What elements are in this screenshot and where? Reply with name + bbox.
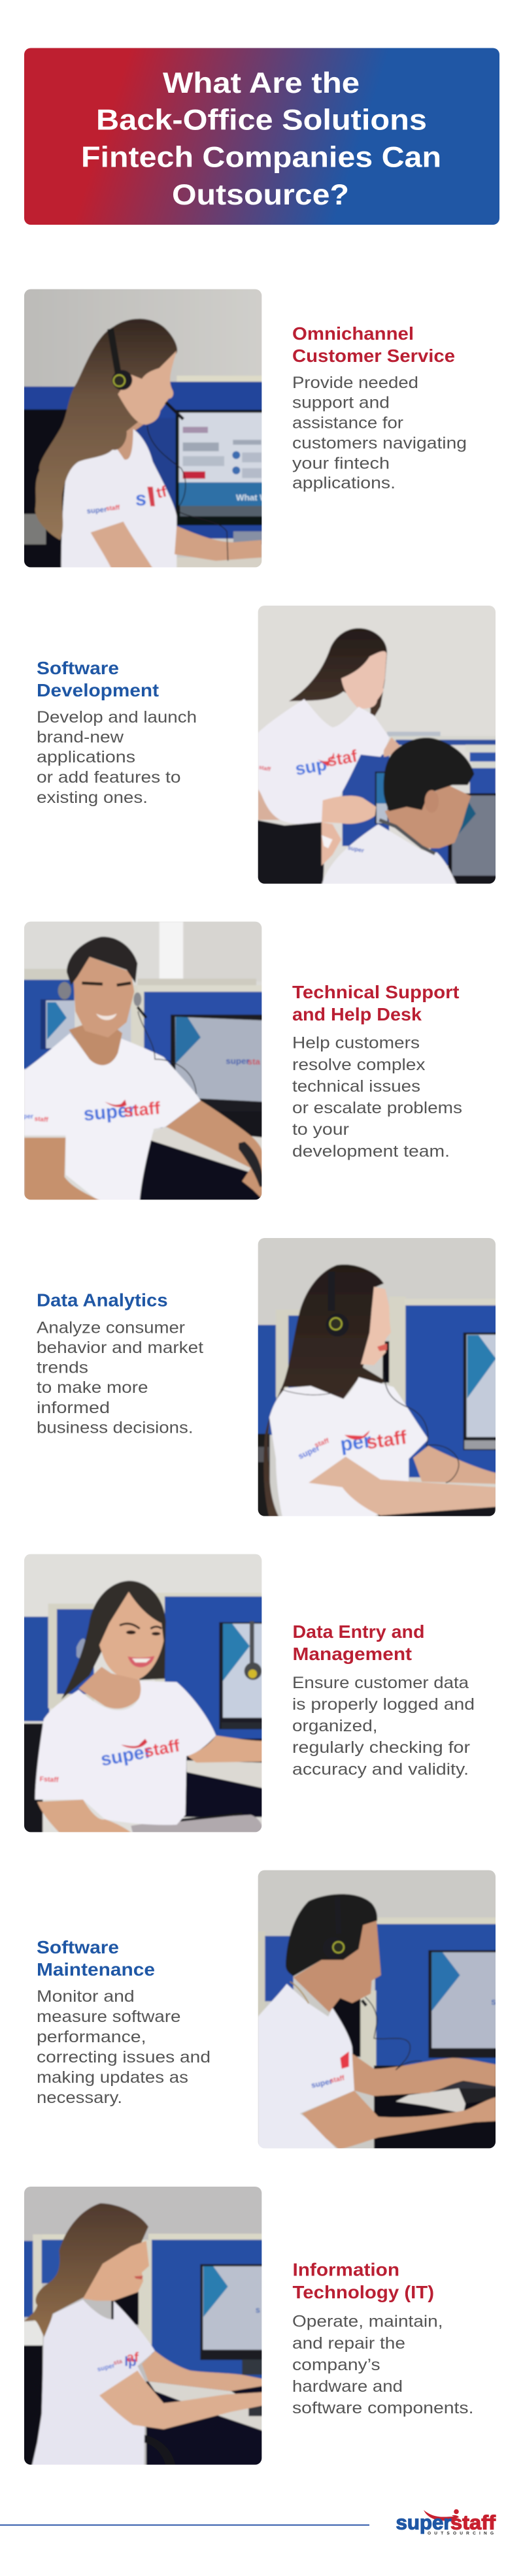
description: making updates as bbox=[37, 2068, 188, 2087]
photo: male agent typing bbox=[256, 1868, 498, 2151]
description: Operate, maintain, bbox=[292, 2313, 443, 2331]
description: to your bbox=[292, 1120, 349, 1139]
description bbox=[37, 1987, 211, 2107]
heading bbox=[292, 982, 459, 1024]
heading: Data Entry and bbox=[293, 1622, 425, 1642]
description: customers navigating bbox=[292, 434, 467, 453]
heading: and Help Desk bbox=[292, 1004, 422, 1024]
heading: Information bbox=[293, 2260, 399, 2280]
description: accuracy and validity. bbox=[292, 1760, 469, 1778]
description: Help customers bbox=[292, 1034, 420, 1052]
description: organized, bbox=[292, 1717, 378, 1735]
description: resolve complex bbox=[292, 1056, 426, 1074]
photo: smiling agent facing camera: staff bbox=[143, 1735, 181, 1761]
title: What Are the bbox=[163, 67, 360, 99]
photo: two colleagues at a monitor: staff bbox=[258, 764, 271, 772]
panel: information technology bbox=[22, 2185, 474, 2468]
photo: female agent typing: S bbox=[256, 2307, 260, 2315]
banner background bbox=[24, 48, 499, 225]
description: performance, bbox=[37, 2028, 146, 2046]
photo: male agent typing: S bbox=[491, 1998, 496, 2006]
photo: smiling agent with headset: sta bbox=[248, 1057, 261, 1067]
description: hardware and bbox=[292, 2377, 403, 2396]
panel: data entry and management bbox=[22, 1554, 475, 1836]
description: or add features to bbox=[37, 768, 180, 787]
description: behavior and market bbox=[37, 1339, 203, 1357]
logo dot bbox=[454, 2509, 459, 2514]
photo: smiling agent with headset: super bbox=[82, 1099, 137, 1125]
description bbox=[292, 2313, 473, 2417]
heading bbox=[293, 1622, 425, 1664]
footer rule bbox=[0, 2524, 369, 2526]
photo: agent in profile at desk: staff bbox=[314, 1437, 330, 1449]
heading: Maintenance bbox=[37, 1959, 155, 1980]
heading: Development bbox=[37, 680, 159, 700]
panel: omnichannel customer service bbox=[22, 287, 467, 570]
heading: Management bbox=[293, 1644, 412, 1664]
panel: technical support and help desk bbox=[22, 920, 462, 1203]
photo: female agent typing: af bbox=[127, 2350, 139, 2365]
description: is properly logged and bbox=[292, 1695, 475, 1714]
photo: male agent typing: staff bbox=[329, 2074, 345, 2085]
photo: smiling agent with headset: super bbox=[226, 1056, 250, 1066]
photo: smiling agent facing camera: Fstaff bbox=[39, 1775, 59, 1784]
photo: agent in profile at desk bbox=[256, 1237, 498, 1520]
photo: agent with headset: What W bbox=[236, 493, 268, 502]
description: regularly checking for bbox=[292, 1738, 470, 1757]
heading: Software bbox=[37, 1937, 119, 1957]
photo: male agent typing: super bbox=[311, 2076, 333, 2090]
photo: two colleagues at a monitor: staf bbox=[326, 746, 359, 770]
description: assistance for bbox=[292, 414, 403, 432]
description: trends bbox=[37, 1359, 88, 1377]
description bbox=[37, 1318, 203, 1437]
logo: superstaff outsourcing bbox=[396, 2509, 496, 2536]
heading: Omnichannel bbox=[292, 323, 414, 344]
title: Back-Office Solutions bbox=[96, 105, 427, 137]
description: software components. bbox=[292, 2399, 473, 2417]
description: measure software bbox=[37, 2008, 180, 2026]
description bbox=[292, 374, 467, 493]
photo: two colleagues at a monitor: sup bbox=[294, 754, 328, 779]
description: brand-new bbox=[37, 728, 124, 747]
description: development team. bbox=[292, 1142, 450, 1160]
description: your fintech bbox=[292, 455, 390, 473]
photo: female agent typing: super bbox=[97, 2362, 116, 2373]
panel: software maintenance bbox=[37, 1868, 498, 2151]
description bbox=[292, 1674, 475, 1778]
title: Outsource? bbox=[172, 179, 349, 211]
photo: smiling agent facing camera: super bbox=[99, 1741, 153, 1770]
description: applications. bbox=[292, 474, 396, 493]
logo wordmark: super bbox=[396, 2511, 451, 2534]
heading: Software bbox=[37, 658, 119, 678]
title banner bbox=[24, 48, 499, 225]
heading bbox=[37, 1937, 155, 1980]
description: company’s bbox=[292, 2356, 380, 2374]
photo: smiling agent with headset: per bbox=[23, 1113, 33, 1120]
panel: software development bbox=[37, 604, 498, 887]
photo: female agent typing: lp bbox=[124, 2355, 137, 2370]
description: technical issues bbox=[292, 1077, 420, 1096]
photo: agent with headset: s bbox=[135, 487, 146, 510]
description: and repair the bbox=[292, 2334, 405, 2353]
photo: smiling agent with headset: staff bbox=[34, 1115, 49, 1124]
photo: agent in profile at desk: per bbox=[339, 1429, 373, 1456]
photo: agent in profile at desk: staff bbox=[365, 1427, 409, 1454]
description: informed bbox=[37, 1399, 110, 1417]
logo wordmark bbox=[396, 2511, 496, 2534]
description: necessary. bbox=[37, 2089, 122, 2107]
photo: agent in profile at desk: super bbox=[297, 1443, 321, 1461]
description bbox=[292, 1034, 462, 1160]
description: business decisions. bbox=[37, 1419, 194, 1437]
photo: smiling agent with headset bbox=[22, 920, 264, 1203]
photo: agent with headset bbox=[22, 287, 268, 570]
description: Ensure customer data bbox=[292, 1674, 469, 1692]
title bbox=[81, 67, 441, 211]
description: Monitor and bbox=[37, 1987, 135, 2006]
description: existing ones. bbox=[37, 789, 148, 807]
photo: female agent typing bbox=[22, 2185, 265, 2468]
heading bbox=[292, 323, 455, 366]
description: support and bbox=[292, 394, 390, 412]
title: Fintech Companies Can bbox=[81, 141, 441, 174]
logo tagline: OUTSOURCING bbox=[428, 2531, 494, 2536]
description: Analyze consumer bbox=[37, 1318, 185, 1337]
heading: Technical Support bbox=[292, 982, 459, 1002]
logo swoosh bbox=[424, 2510, 459, 2520]
photo: two colleagues at a monitor bbox=[256, 604, 498, 887]
photo: agent with headset: staff bbox=[106, 504, 120, 513]
logo wordmark: staff bbox=[450, 2511, 496, 2534]
heading: Data Analytics bbox=[37, 1290, 168, 1311]
description: Provide needed bbox=[292, 374, 418, 392]
photo: female agent typing: sta bbox=[112, 2358, 124, 2366]
photo: agent with headset: tf bbox=[155, 483, 168, 502]
description bbox=[37, 708, 197, 807]
description: or escalate problems bbox=[292, 1099, 462, 1117]
panel: data analytics bbox=[37, 1237, 498, 1520]
heading: Customer Service bbox=[292, 346, 455, 366]
photo: agent with headset: super bbox=[86, 506, 108, 515]
photo: smiling agent facing camera bbox=[22, 1554, 264, 1836]
description: Develop and launch bbox=[37, 708, 197, 726]
photo: two colleagues at a monitor: super bbox=[347, 844, 365, 854]
heading bbox=[293, 2260, 434, 2302]
photo: smiling agent with headset: staff bbox=[123, 1098, 161, 1121]
description: applications bbox=[37, 748, 135, 766]
heading: Technology (IT) bbox=[293, 2282, 434, 2302]
description: correcting issues and bbox=[37, 2048, 211, 2066]
heading bbox=[37, 658, 159, 700]
description: to make more bbox=[37, 1378, 148, 1397]
